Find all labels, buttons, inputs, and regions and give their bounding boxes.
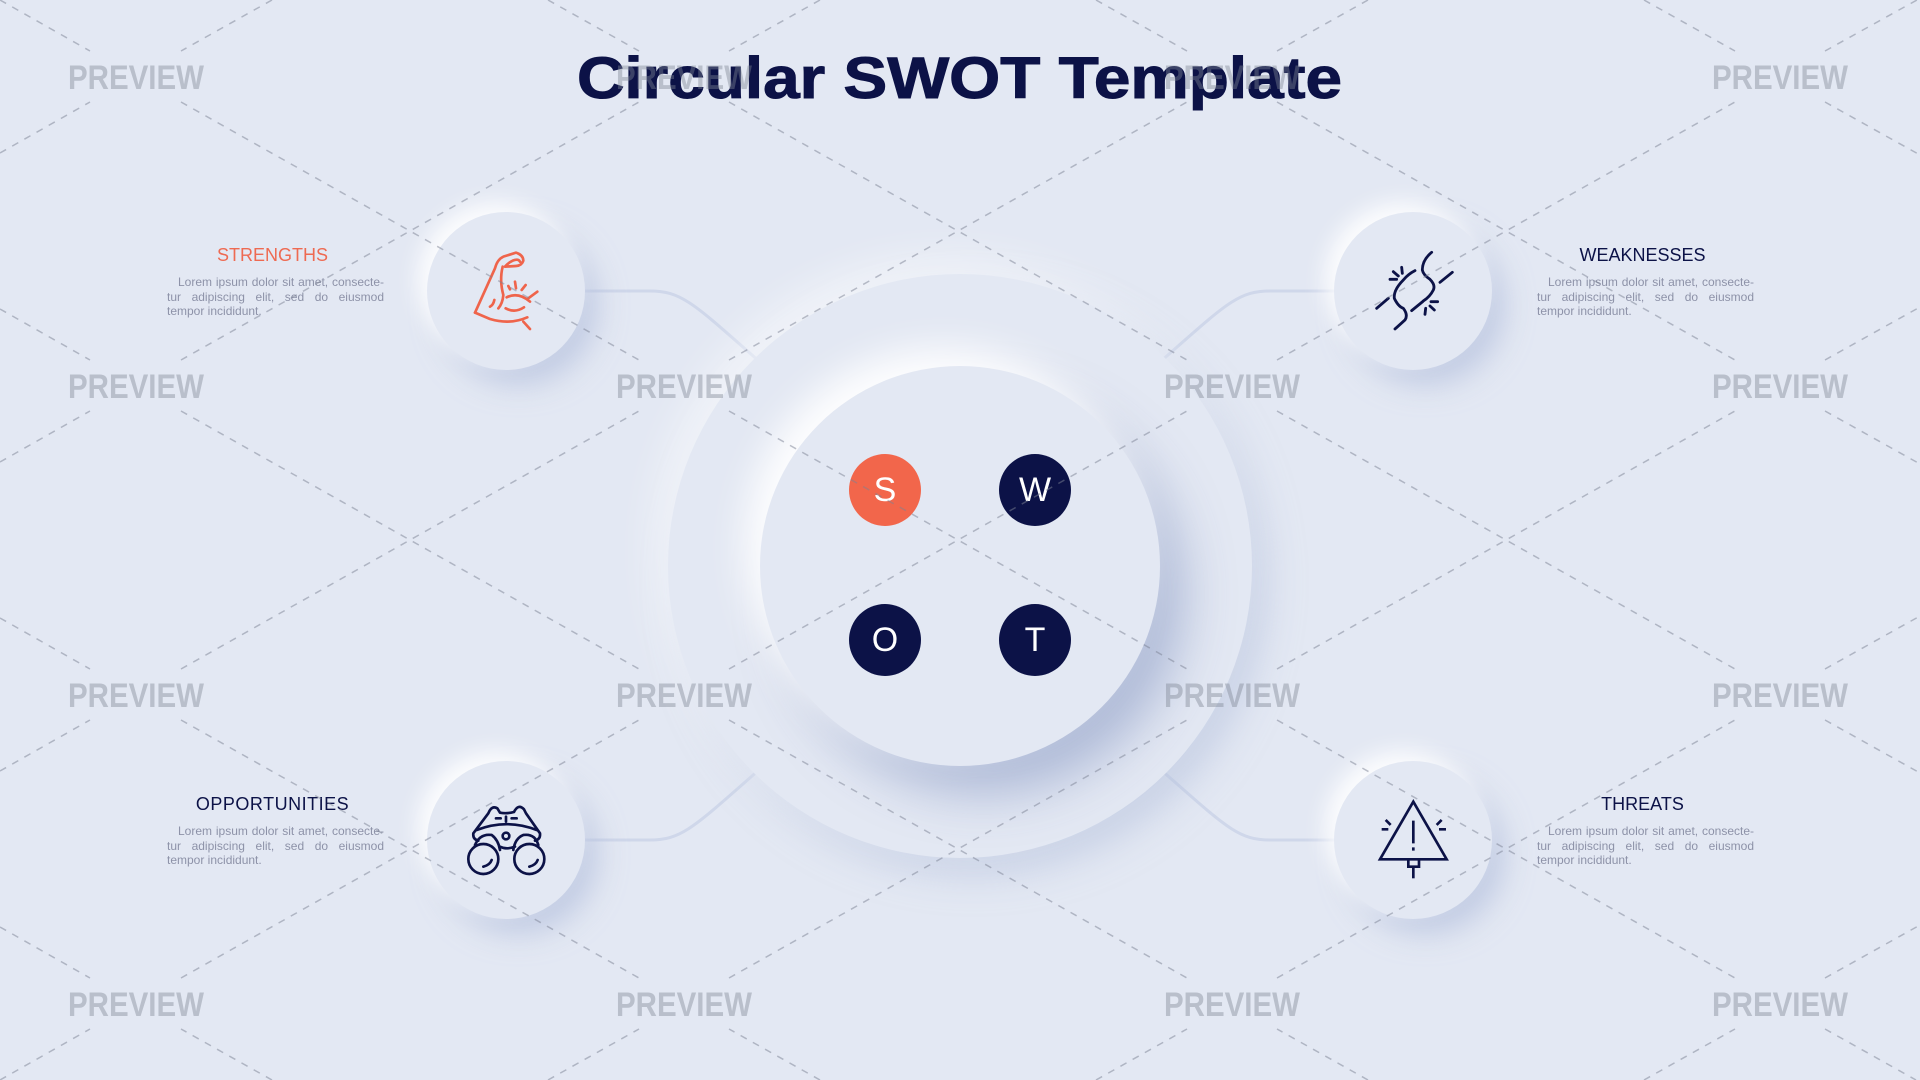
heading: opportunities: OPPORTUNITIES: [196, 794, 349, 814]
panel: opportunities: [167, 748, 606, 942]
body: threats: Lorem ipsum dolor sit amet, consecte-: [1548, 824, 1754, 838]
panel: weaknesses: [1317, 198, 1754, 394]
watermark overlay: PREVIEW: [68, 677, 205, 715]
badge T: [999, 604, 1071, 676]
watermark overlay: PREVIEW: [616, 368, 753, 406]
body: threats: [1537, 824, 1754, 867]
threats text: [1537, 794, 1754, 867]
watermark overlay: PREVIEW: [1164, 677, 1301, 715]
watermark overlay: PREVIEW: [68, 368, 205, 406]
body: strengths: tempor incididunt.: [167, 304, 262, 318]
badge W: [999, 454, 1071, 526]
watermark overlay: PREVIEW: [616, 986, 753, 1024]
body: strengths: tur adipiscing elit, sed do eiusmod: [167, 290, 384, 304]
body: threats: tempor incididunt.: [1537, 853, 1632, 867]
watermark overlay: PREVIEW: [616, 59, 753, 97]
watermark overlay: PREVIEW: [68, 59, 205, 97]
outer central disc: [668, 274, 1252, 858]
watermark overlay: PREVIEW: [1712, 368, 1849, 406]
badge T: T: [1025, 621, 1045, 659]
badge W: W: [1019, 471, 1051, 509]
body: strengths: [167, 275, 384, 318]
panel: threats: [1317, 748, 1754, 942]
icon: broken chain: [1334, 212, 1492, 370]
badge O: [849, 604, 921, 676]
body: weaknesses: tur adipiscing elit, sed do eiusmod: [1537, 290, 1754, 304]
watermark overlay: PREVIEW: [1712, 59, 1849, 97]
body: weaknesses: [1537, 275, 1754, 318]
body: opportunities: [167, 824, 384, 867]
body: weaknesses: tempor incididunt.: [1537, 304, 1632, 318]
body: weaknesses: Lorem ipsum dolor sit amet, consecte-: [1548, 275, 1754, 289]
badge S: S: [874, 471, 896, 509]
body: strengths: Lorem ipsum dolor sit amet, consecte-: [178, 275, 384, 289]
watermark overlay: PREVIEW: [1712, 986, 1849, 1024]
badge O: O: [872, 621, 898, 659]
heading: threats: THREATS: [1601, 794, 1684, 814]
panel: strengths: [167, 198, 606, 394]
heading: strengths: STRENGTHS: [217, 245, 328, 265]
icon: warning triangle: [1334, 761, 1492, 919]
body: opportunities: tur adipiscing elit, sed do eiusmod: [167, 838, 384, 852]
icon: binoculars: [427, 761, 585, 919]
title: Circular SWOT Template: [577, 46, 1342, 111]
watermark overlay: PREVIEW: [1164, 986, 1301, 1024]
watermark overlay: PREVIEW: [1164, 368, 1301, 406]
watermark overlay: PREVIEW: [68, 986, 205, 1024]
badge S: [849, 454, 921, 526]
body: opportunities: tempor incididunt.: [167, 853, 262, 867]
strengths text: [167, 245, 384, 318]
inner central disc with SWOT letters: [760, 366, 1160, 766]
icon: flexed arm: [427, 212, 585, 370]
body: opportunities: Lorem ipsum dolor sit amet, consecte-: [178, 824, 384, 838]
heading: weaknesses: WEAKNESSES: [1579, 245, 1706, 265]
watermark overlay: PREVIEW: [616, 677, 753, 715]
watermark overlay: PREVIEW: [1164, 59, 1301, 97]
body: threats: tur adipiscing elit, sed do eiusmod: [1537, 838, 1754, 852]
weaknesses text: [1537, 245, 1754, 318]
watermark overlay: PREVIEW: [1712, 677, 1849, 715]
opportunities text: [167, 794, 384, 867]
